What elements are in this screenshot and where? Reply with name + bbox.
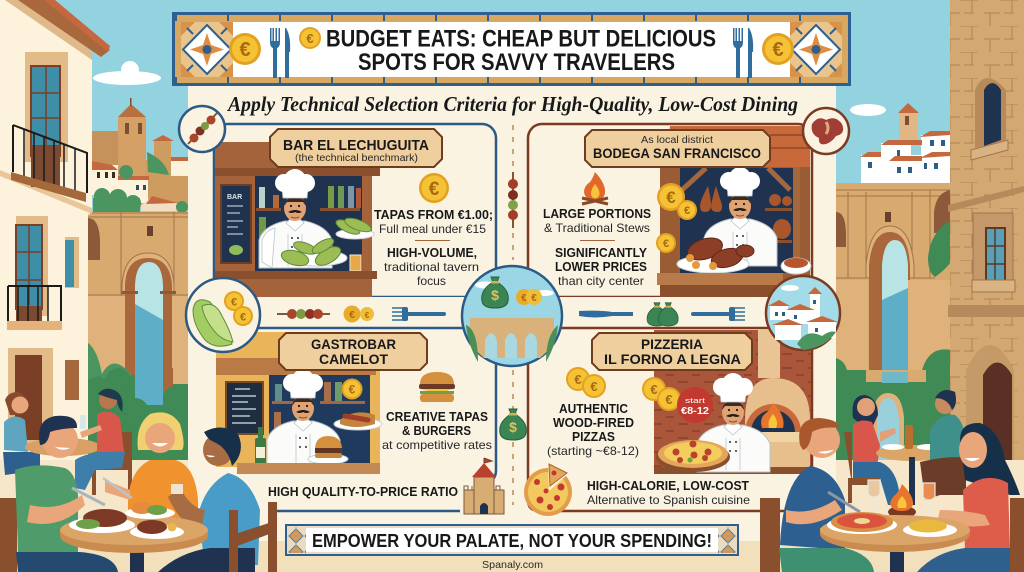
wine glasses and flame [868, 480, 935, 518]
icon: coins: € [666, 188, 676, 207]
icon: left cutlery [270, 28, 290, 78]
icon: left coins: € [574, 372, 582, 387]
price text: than city center [558, 274, 644, 288]
bar illustration: BAR [227, 194, 242, 201]
circle: central aqueduct: € [521, 293, 527, 304]
sign: (the technical benchmark) [295, 153, 418, 164]
icon: coins: € [684, 205, 690, 217]
pizza text: (starting ~€8-12) [547, 444, 639, 458]
chairs [760, 498, 1024, 572]
icon: right euro coin [762, 33, 794, 65]
icon: right azulejo tile [790, 22, 842, 77]
circle: lettuce and coins badge: € [240, 312, 246, 324]
sign: BODEGA SAN FRANCISCO [593, 145, 761, 161]
icon: small euro coin [299, 27, 321, 49]
oven illustration [654, 330, 811, 474]
courtyard ground wall [0, 460, 188, 572]
chair [229, 502, 277, 572]
pizza text: AUTHENTIC [559, 401, 629, 416]
chef [697, 373, 770, 472]
sign [279, 333, 427, 370]
alternative text: Alternative to Spanish cuisine [587, 493, 750, 507]
table with plates [60, 502, 208, 572]
closing banner [285, 524, 739, 556]
circle: white village [766, 276, 840, 350]
sign: GASTROBAR [311, 336, 396, 352]
bar illustration [215, 142, 380, 297]
bar illustration: € [349, 382, 356, 396]
icon: strip coins: € [349, 310, 355, 321]
closing banner: EMPOWER YOUR PALATE, NOT YOUR SPENDING! [312, 531, 712, 551]
circle: skewer badge [179, 106, 225, 152]
bar illustration [657, 126, 811, 297]
back table diners [844, 390, 966, 505]
icon: left euro coin [229, 33, 261, 65]
icon: oven coins [642, 377, 681, 411]
bar illustration [216, 332, 382, 474]
focus text: traditional tavern [384, 260, 479, 274]
chair and figure: man in green [0, 416, 118, 572]
icon: divider skewer [508, 172, 518, 228]
icon: left coins: € [590, 379, 598, 394]
circle: lettuce and coins badge [186, 278, 260, 352]
icon: strip coins: € [365, 311, 370, 320]
right stone tower [948, 0, 1024, 470]
title text: SPOTS FOR SAVVY TRAVELERS [358, 49, 675, 76]
price text: Full meal under €15 [379, 222, 486, 236]
woman in coral shirt [917, 423, 1020, 572]
portion text: LARGE PORTIONS [543, 206, 651, 221]
icon: small euro coin: € [306, 31, 314, 46]
price text [374, 207, 493, 236]
icon: strip knife [579, 311, 633, 318]
sign: CAMELOT [319, 351, 388, 367]
price text: SIGNIFICANTLY [555, 245, 647, 260]
circle: central aqueduct: $ [491, 287, 499, 303]
circle: central aqueduct [462, 266, 562, 366]
man in blue [158, 427, 260, 572]
icon: castle [464, 458, 504, 514]
woman in orange [103, 412, 198, 520]
sign: As local district [641, 135, 713, 146]
menu text: CREATIVE TAPAS [386, 409, 488, 424]
circle: central aqueduct: € [531, 293, 537, 304]
left lower greenery [87, 342, 188, 465]
icon: campfire [582, 172, 608, 204]
circle: lettuce and coins badge: € [231, 296, 237, 308]
price badge: start [685, 396, 706, 405]
right diners scene [760, 390, 1024, 572]
chef [704, 167, 777, 266]
panel: Bar El Lechuguita [214, 124, 496, 297]
title text [326, 26, 716, 76]
icon: euro coin [419, 173, 449, 203]
subtitle: Apply Technical Selection Criteria for High-Quality, Low-Cost Dining [226, 92, 798, 116]
panel: Bodega San Francisco [528, 124, 812, 297]
icon: left azulejo tile [181, 22, 233, 77]
left hill town [92, 98, 188, 213]
menu text: at competitive rates [382, 438, 492, 452]
icon: strip fork [691, 307, 745, 321]
right hill town [860, 103, 950, 185]
price text: LOWER PRICES [555, 259, 647, 274]
icon: strip coins [344, 306, 374, 322]
right bridge [836, 183, 951, 383]
icon: euro coin: € [429, 179, 440, 200]
back table diners [3, 389, 132, 495]
icon: oven coins: € [665, 392, 673, 407]
icon: divider money bag: $ [509, 419, 517, 435]
source credit: Spanaly.com [482, 559, 543, 571]
strip between left panels [214, 297, 496, 328]
icon: strip skewer [277, 309, 330, 319]
sign: BAR EL LECHUGUITA [283, 137, 429, 154]
left bridge [88, 212, 188, 386]
pizza text: PIZZAS [572, 429, 615, 444]
panel: Gastrobar Camelot [214, 328, 504, 514]
sign [592, 333, 752, 370]
wine bottle [255, 427, 266, 466]
icon: divider money bag [500, 409, 526, 440]
price badge: €8-12 [681, 406, 709, 417]
title banner [172, 12, 851, 86]
panel: Pizzeria Il Forno a Legna [524, 328, 812, 516]
icon: coins: € [663, 238, 669, 250]
strip between right panels [528, 297, 812, 328]
icon: pizza [524, 463, 572, 516]
left building [0, 0, 110, 572]
focus text: HIGH-VOLUME, [387, 245, 477, 260]
main cream panel [188, 85, 836, 572]
price badge [677, 387, 713, 423]
sign [585, 130, 770, 167]
focus text: focus [417, 274, 446, 288]
icon: left euro coin: € [239, 39, 251, 61]
title text: BUDGET EATS: CHEAP BUT DELICIOUS [326, 26, 716, 52]
circle: meat badge [803, 108, 849, 154]
pizza text: WOOD-FIRED [553, 415, 634, 430]
left diners scene [0, 389, 277, 572]
right lower courtyard [836, 370, 951, 460]
ground strip [0, 541, 1024, 572]
icon: left coins [566, 367, 606, 398]
icon: coins [656, 183, 697, 253]
price text: TAPAS FROM €1.00; [374, 207, 493, 222]
menu text: & BURGERS [402, 423, 471, 438]
alternative text [587, 478, 750, 507]
focus text [384, 245, 479, 288]
icon: strip money bags [647, 303, 678, 326]
chef [259, 169, 332, 268]
chef [267, 369, 340, 468]
pizza text [547, 401, 639, 458]
table with pizza and plate [820, 512, 970, 572]
sign: PIZZERIA [641, 336, 703, 352]
central dotted divider [512, 125, 514, 505]
price text [555, 245, 647, 288]
icon: strip fork [392, 307, 446, 321]
icon: oven coins: € [650, 382, 658, 397]
icon: burger [419, 372, 455, 402]
sign: IL FORNO A LEGNA [604, 351, 741, 367]
icon: right cutlery [733, 28, 753, 78]
alternative text: HIGH-CALORIE, LOW-COST [587, 478, 749, 493]
icon: right euro coin: € [772, 39, 784, 61]
portion text [543, 206, 651, 235]
portion text: & Traditional Stews [544, 221, 650, 235]
sign [270, 129, 442, 167]
ratio text: HIGH QUALITY-TO-PRICE RATIO [268, 484, 458, 499]
menu text [382, 409, 492, 452]
boy in blue shirt [779, 418, 874, 572]
